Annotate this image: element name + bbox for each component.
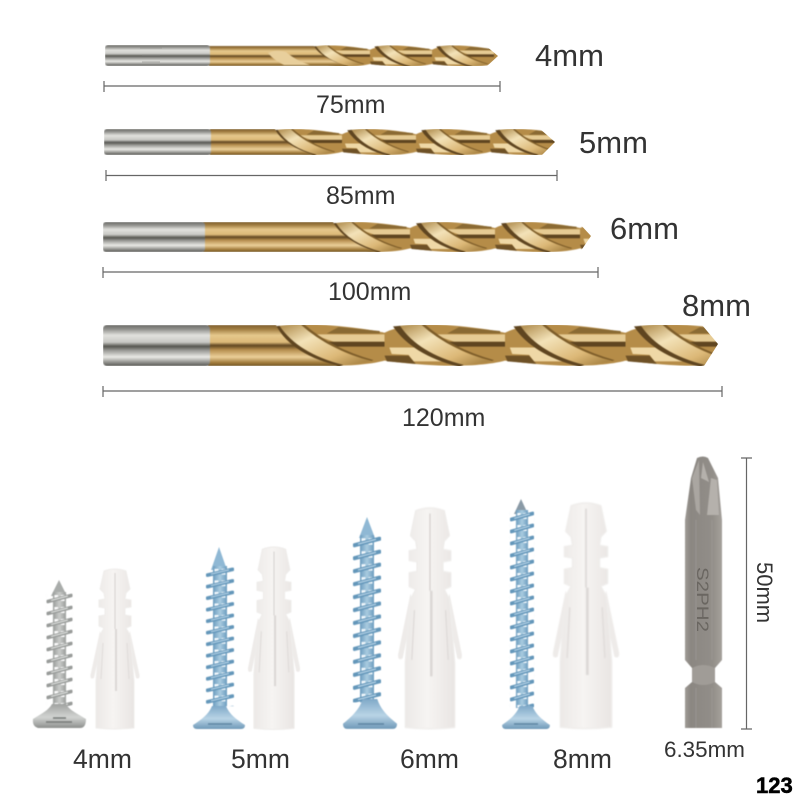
screw 8mm [502, 499, 550, 729]
screws and wall anchors [33, 499, 619, 774]
label 6mm drill: 6mm [610, 211, 679, 246]
dimension line 50mm [741, 458, 752, 729]
label 4mm screw: 4mm [73, 744, 132, 774]
screw 5mm [193, 547, 245, 729]
anchor 8mm [553, 503, 619, 729]
label 120mm: 120mm [402, 404, 485, 432]
label 50mm: 50mm [752, 562, 777, 623]
label 6.35mm: 6.35mm [664, 737, 745, 762]
label 75mm: 75mm [316, 91, 385, 119]
bit body [685, 456, 722, 728]
anchor 5mm [248, 547, 300, 729]
screwdriver bit [664, 456, 777, 762]
dimension line 85mm [106, 170, 557, 181]
drill bit 6mm [103, 222, 591, 252]
drill bit 5mm [104, 128, 564, 155]
label 85mm: 85mm [326, 182, 395, 210]
label 100mm: 100mm [328, 278, 411, 306]
screw 6mm [343, 517, 397, 729]
label 4mm drill: 4mm [535, 38, 604, 73]
drill bit 8mm [103, 324, 746, 366]
label 6mm screw: 6mm [400, 744, 459, 774]
drill bit 4mm [105, 45, 498, 66]
drill bit set [103, 38, 751, 432]
dimension line 120mm [103, 386, 722, 397]
anchor 4mm [90, 569, 140, 729]
bit marking: S2PH2 [693, 567, 712, 632]
label 5mm screw: 5mm [231, 744, 290, 774]
label 8mm drill: 8mm [682, 288, 751, 323]
watermark number: 123 [756, 773, 793, 798]
dimension line 75mm [104, 81, 500, 92]
anchor 6mm [398, 508, 462, 729]
screw 4mm [33, 580, 86, 728]
label 5mm drill: 5mm [579, 125, 648, 160]
label 8mm screw: 8mm [553, 744, 612, 774]
dimension line 100mm [103, 267, 598, 278]
